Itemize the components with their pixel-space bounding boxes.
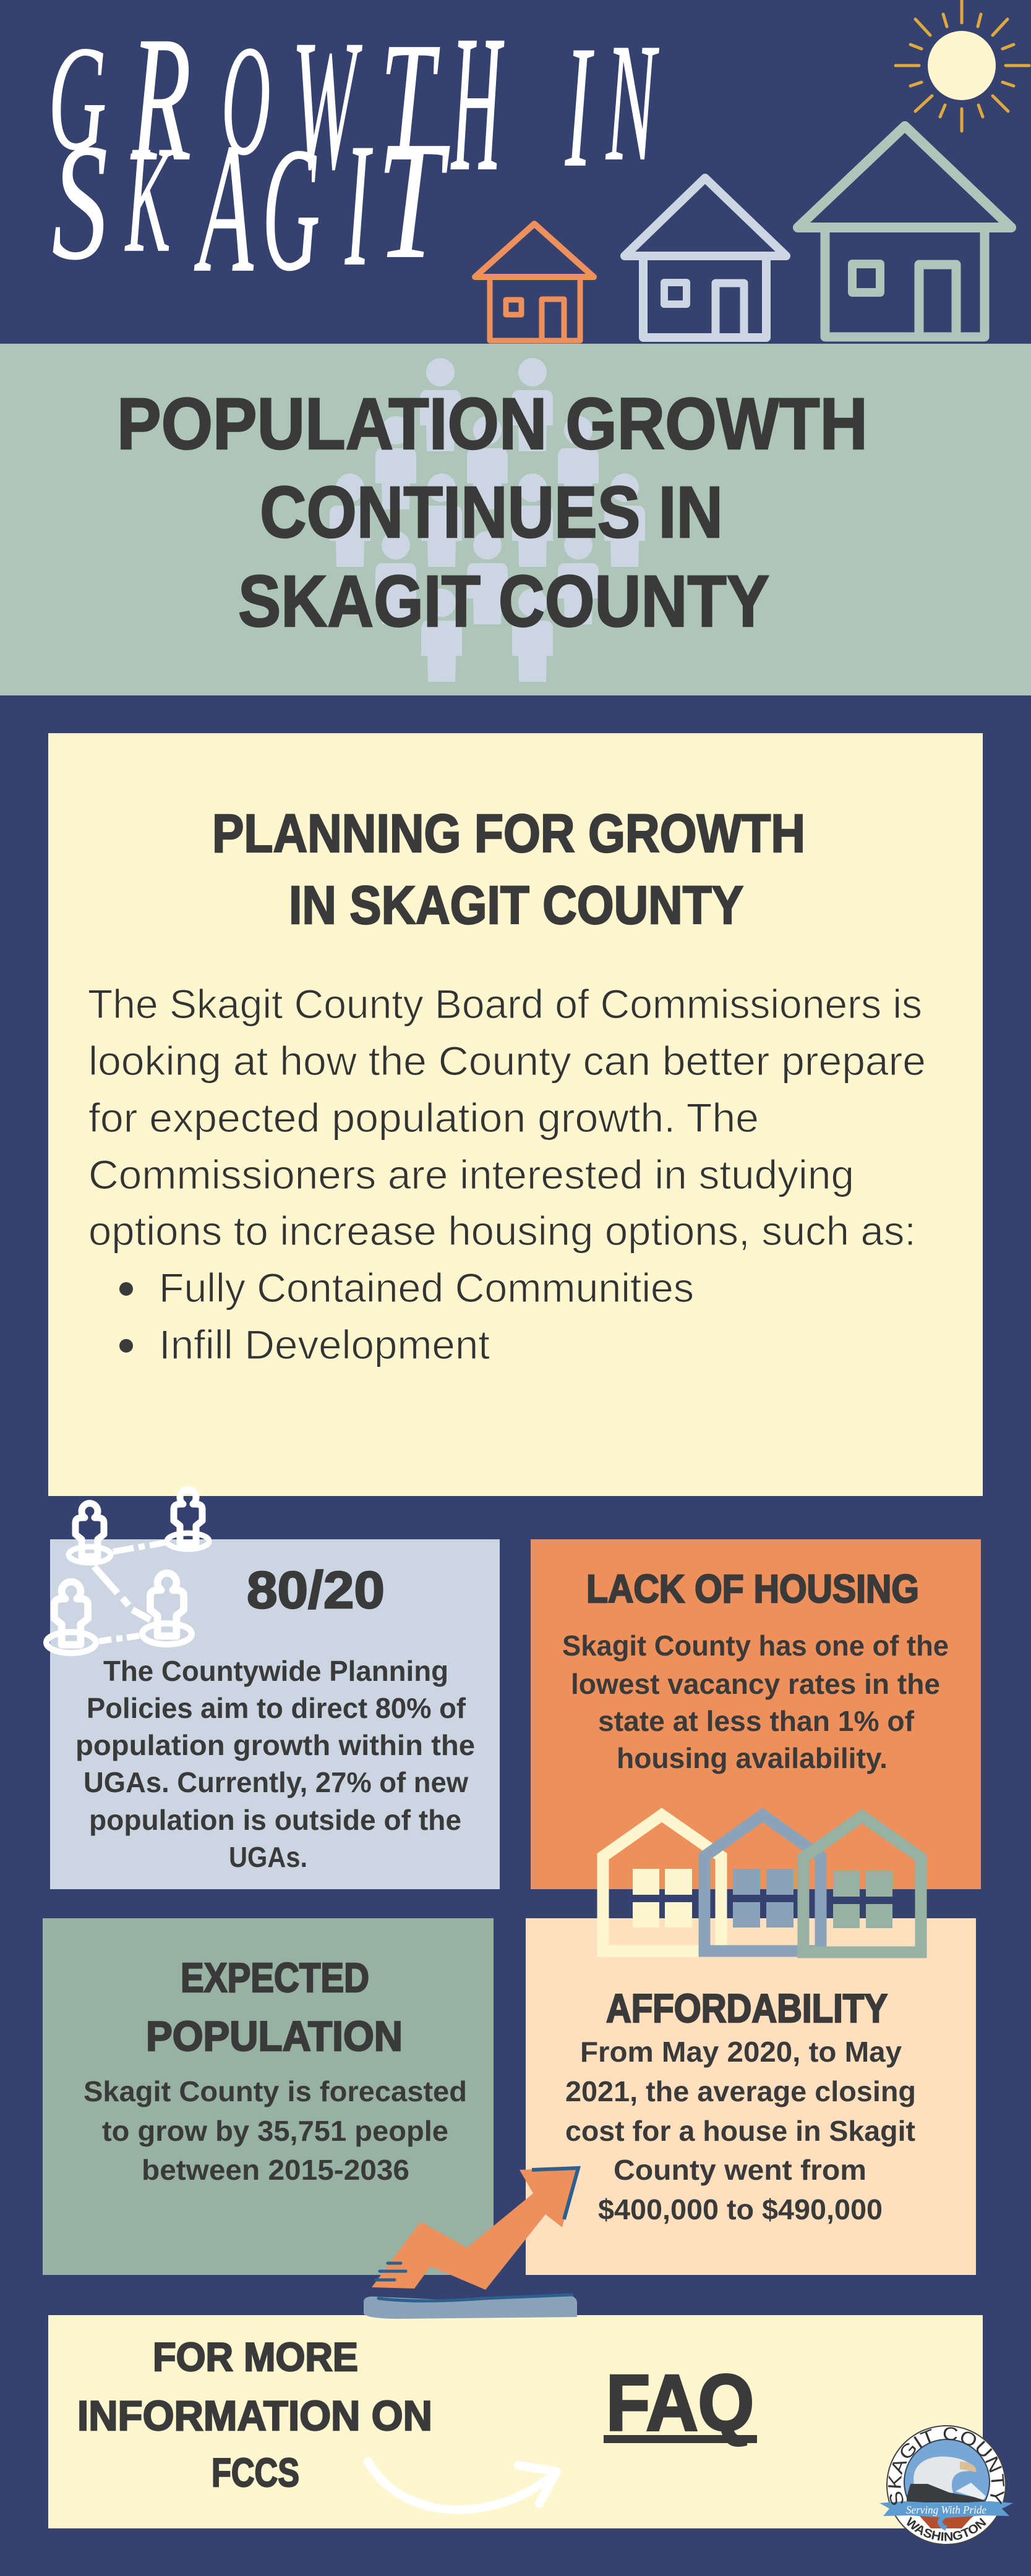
title: Growth in Skagit — [48, 0, 659, 310]
panel: lack of housing — [531, 1539, 981, 1889]
text block: planning body: for expected population growth. The — [88, 1095, 759, 1141]
panel: expected population — [43, 1918, 494, 2275]
icon: medium grey house — [625, 178, 786, 339]
text block: 80/20 body: UGAs. Currently, 27% of new — [83, 1766, 468, 1798]
icon: network of people — [46, 1490, 209, 1653]
heading: population growth continues: SKAGIT COUNTY — [238, 561, 769, 642]
title: Growth in Skagit: G — [262, 112, 320, 308]
title: Growth in Skagit: A — [194, 105, 254, 310]
panel: for more information — [48, 2315, 983, 2528]
list: housing options — [119, 1265, 694, 1367]
text block: expected population body: to grow by 35,751 people — [102, 2115, 448, 2147]
heading: lack of housing: LACK OF HOUSING — [586, 1566, 919, 1611]
logo: Skagit County seal: Serving With Pride — [906, 2504, 986, 2516]
heading: planning for growth: IN SKAGIT COUNTY — [289, 875, 743, 935]
title: Growth in Skagit: S — [52, 109, 108, 294]
text block: affordability body: County went from — [614, 2154, 866, 2186]
title: Growth in Skagit: T — [377, 107, 450, 293]
list: housing options: Infill Development — [159, 1322, 490, 1367]
panel: affordability — [526, 1918, 976, 2275]
heading: population growth continues: POPULATION GROWTH — [117, 383, 868, 465]
logo: Skagit County seal: WASHINGTON — [907, 2517, 986, 2541]
title: Growth in Skagit: G — [48, 16, 106, 182]
title: Growth in Skagit: H — [451, 0, 505, 211]
text block: 80/20 body: The Countywide Planning — [103, 1655, 448, 1687]
heading: expected population — [146, 1955, 403, 2060]
panel: population growth banner — [0, 344, 1031, 695]
text block: lack of housing body: housing availability. — [617, 1742, 888, 1774]
icon: rising arrow chart — [364, 2167, 578, 2319]
arrow: to FAQ — [368, 2462, 557, 2510]
title: Growth in Skagit: R — [130, 1, 191, 198]
text block: affordability body: From May 2020, to May — [580, 2036, 902, 2068]
text block: 80/20 body: population growth within the — [75, 1729, 475, 1761]
eagle head — [907, 2457, 986, 2502]
heading: 80/20: 80/20 — [247, 1561, 385, 1619]
icon: three houses — [603, 1815, 921, 1952]
text block: 80/20 body — [75, 1655, 475, 1873]
heading: population growth continues — [117, 383, 868, 642]
heading: for more information on FCCS: INFORMATION ON — [77, 2392, 432, 2439]
heading: for more information on FCCS: FCCS — [212, 2450, 299, 2495]
title: Growth in Skagit: K — [124, 115, 174, 284]
text block: 80/20 body: Policies aim to direct 80% of — [87, 1692, 466, 1724]
icon: small orange house — [475, 224, 594, 341]
list: housing options: Fully Contained Communities — [159, 1265, 694, 1311]
heading: population growth continues: CONTINUES IN — [260, 472, 723, 553]
text block: planning body: The Skagit County Board of Commissioners is — [88, 981, 922, 1027]
heading: planning for growth: PLANNING FOR GROWTH — [212, 804, 805, 864]
text block: planning body: Commissioners are interested in studying — [88, 1152, 854, 1197]
text block: lack of housing body: Skagit County has one of the — [562, 1630, 949, 1662]
title: Growth in Skagit: T — [380, 8, 440, 196]
text block: affordability body — [565, 2036, 916, 2225]
logo: Skagit County seal — [879, 2425, 1013, 2545]
heading: affordability: AFFORDABILITY — [606, 1986, 888, 2031]
text block: affordability body: cost for a house in Skagit — [565, 2115, 915, 2147]
title: Growth in Skagit: W — [292, 1, 362, 207]
panel: planning for growth — [48, 733, 983, 1496]
icon: sun — [896, 0, 1029, 131]
link: FAQ: FAQ — [606, 2359, 754, 2447]
title: Growth in Skagit: I — [344, 108, 373, 303]
text block: 80/20 body: population is outside of the — [89, 1804, 461, 1836]
title: Growth in Skagit: O — [221, 14, 270, 188]
text block: expected population body: between 2015-2036 — [142, 2154, 409, 2186]
text block: expected population body — [83, 2075, 467, 2186]
text block: lack of housing body: lowest vacancy rates in the — [571, 1668, 940, 1700]
text block: expected population body: Skagit County is forecasted — [83, 2075, 467, 2107]
heading: for more information on FCCS: FOR MORE — [153, 2334, 358, 2379]
heading: expected population: POPULATION — [146, 2013, 403, 2060]
heading: for more information on FCCS — [77, 2334, 432, 2495]
text block: lack of housing body: state at less than 1% of — [598, 1705, 915, 1737]
icon: large green house — [798, 126, 1011, 337]
title: Growth in Skagit: I — [565, 11, 594, 203]
text block: 80/20 body: UGAs. — [229, 1841, 307, 1873]
text block: planning body — [88, 981, 926, 1254]
panel: 80/20 — [50, 1539, 500, 1889]
text block: affordability body: $400,000 to $490,000 — [598, 2193, 883, 2225]
icon: crowd of people — [330, 358, 645, 682]
logo: Skagit County seal: SKAGIT COUNTY — [888, 2427, 1004, 2505]
text block: planning body: looking at how the County can better prepare — [88, 1038, 926, 1084]
heading: planning for growth — [212, 804, 805, 935]
text block: affordability body: 2021, the average closing — [565, 2075, 916, 2107]
text block: lack of housing body — [562, 1630, 949, 1774]
text block: planning body: options to increase housing options, such as: — [88, 1208, 916, 1254]
heading: expected population: EXPECTED — [181, 1955, 369, 2001]
title: Growth in Skagit: N — [605, 9, 659, 196]
